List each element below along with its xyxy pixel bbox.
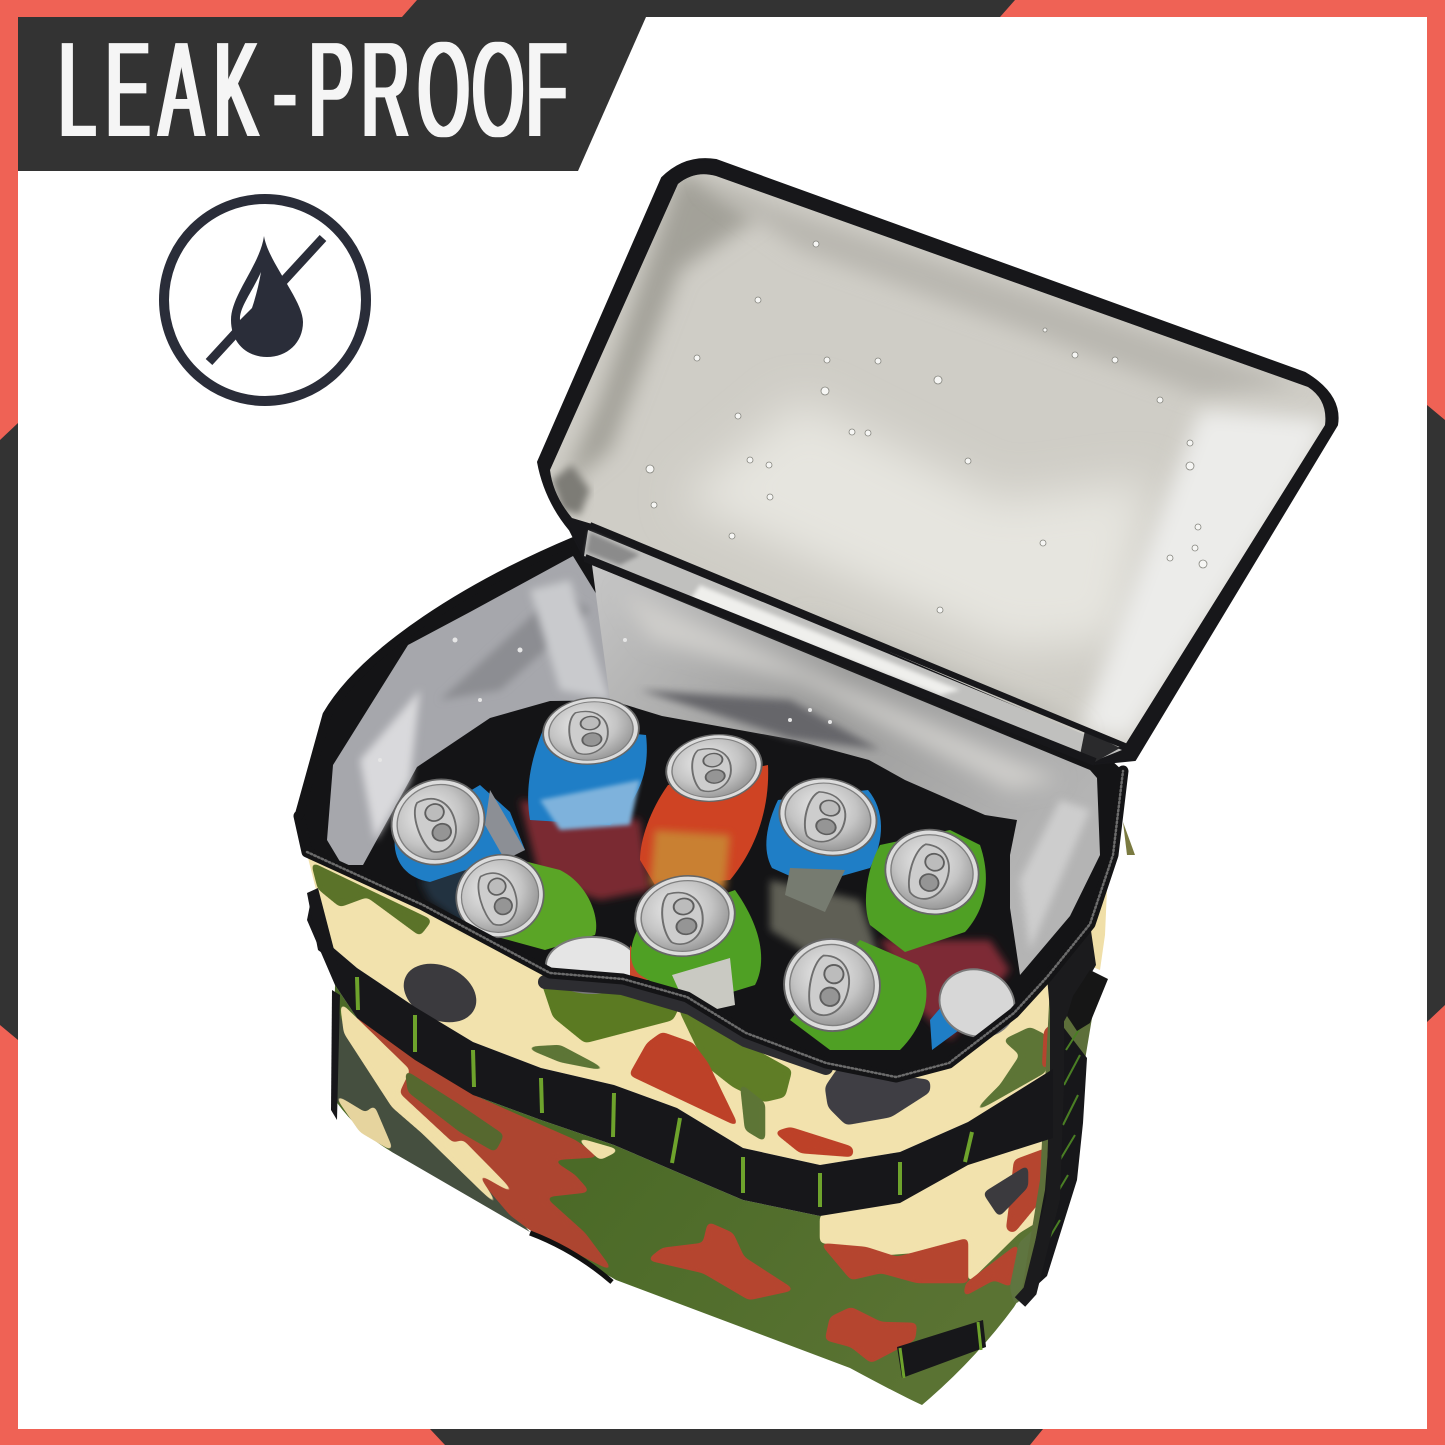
can: green middle xyxy=(630,869,761,1015)
hinge strip xyxy=(584,525,1125,762)
green bar tacks xyxy=(357,977,972,1207)
can: green left xyxy=(445,843,596,950)
can: blue left xyxy=(379,766,525,882)
side seam xyxy=(1020,993,1057,1302)
bag lower front panel xyxy=(333,985,1055,1405)
side strap ladder xyxy=(1025,1020,1087,1296)
water droplets xyxy=(646,241,1207,613)
can: orange xyxy=(640,729,768,890)
lid of bag xyxy=(530,150,1350,770)
title banner xyxy=(18,14,646,171)
can: green right xyxy=(866,819,988,952)
bag upper front panel xyxy=(306,850,1057,1165)
bag side panel with straps xyxy=(1020,822,1135,1302)
side shoulder band xyxy=(1047,924,1096,1025)
icon: crossed-out water drop xyxy=(164,199,366,401)
back wall lining xyxy=(592,565,1100,975)
title: LEAK-PROOF xyxy=(59,14,567,165)
left wall lining xyxy=(327,556,630,865)
interior of bag xyxy=(297,540,1123,1080)
cooler bag xyxy=(297,150,1350,1405)
can: blue back xyxy=(528,693,647,830)
left side straps xyxy=(307,888,340,1120)
interior droplets xyxy=(378,638,832,762)
lid silver lining xyxy=(550,174,1326,747)
webbing belt xyxy=(307,895,1053,1216)
side buckle xyxy=(1067,970,1108,1031)
can: silver partial xyxy=(546,937,650,993)
zipper tag xyxy=(1123,822,1135,855)
bottom handles xyxy=(530,1233,986,1378)
bag opening zipper rim xyxy=(299,541,1123,1077)
can: blue centre right xyxy=(766,770,884,912)
can: green middle right xyxy=(777,931,926,1050)
liquid and ice xyxy=(420,800,1010,1040)
can: blue right partial xyxy=(930,959,1024,1050)
